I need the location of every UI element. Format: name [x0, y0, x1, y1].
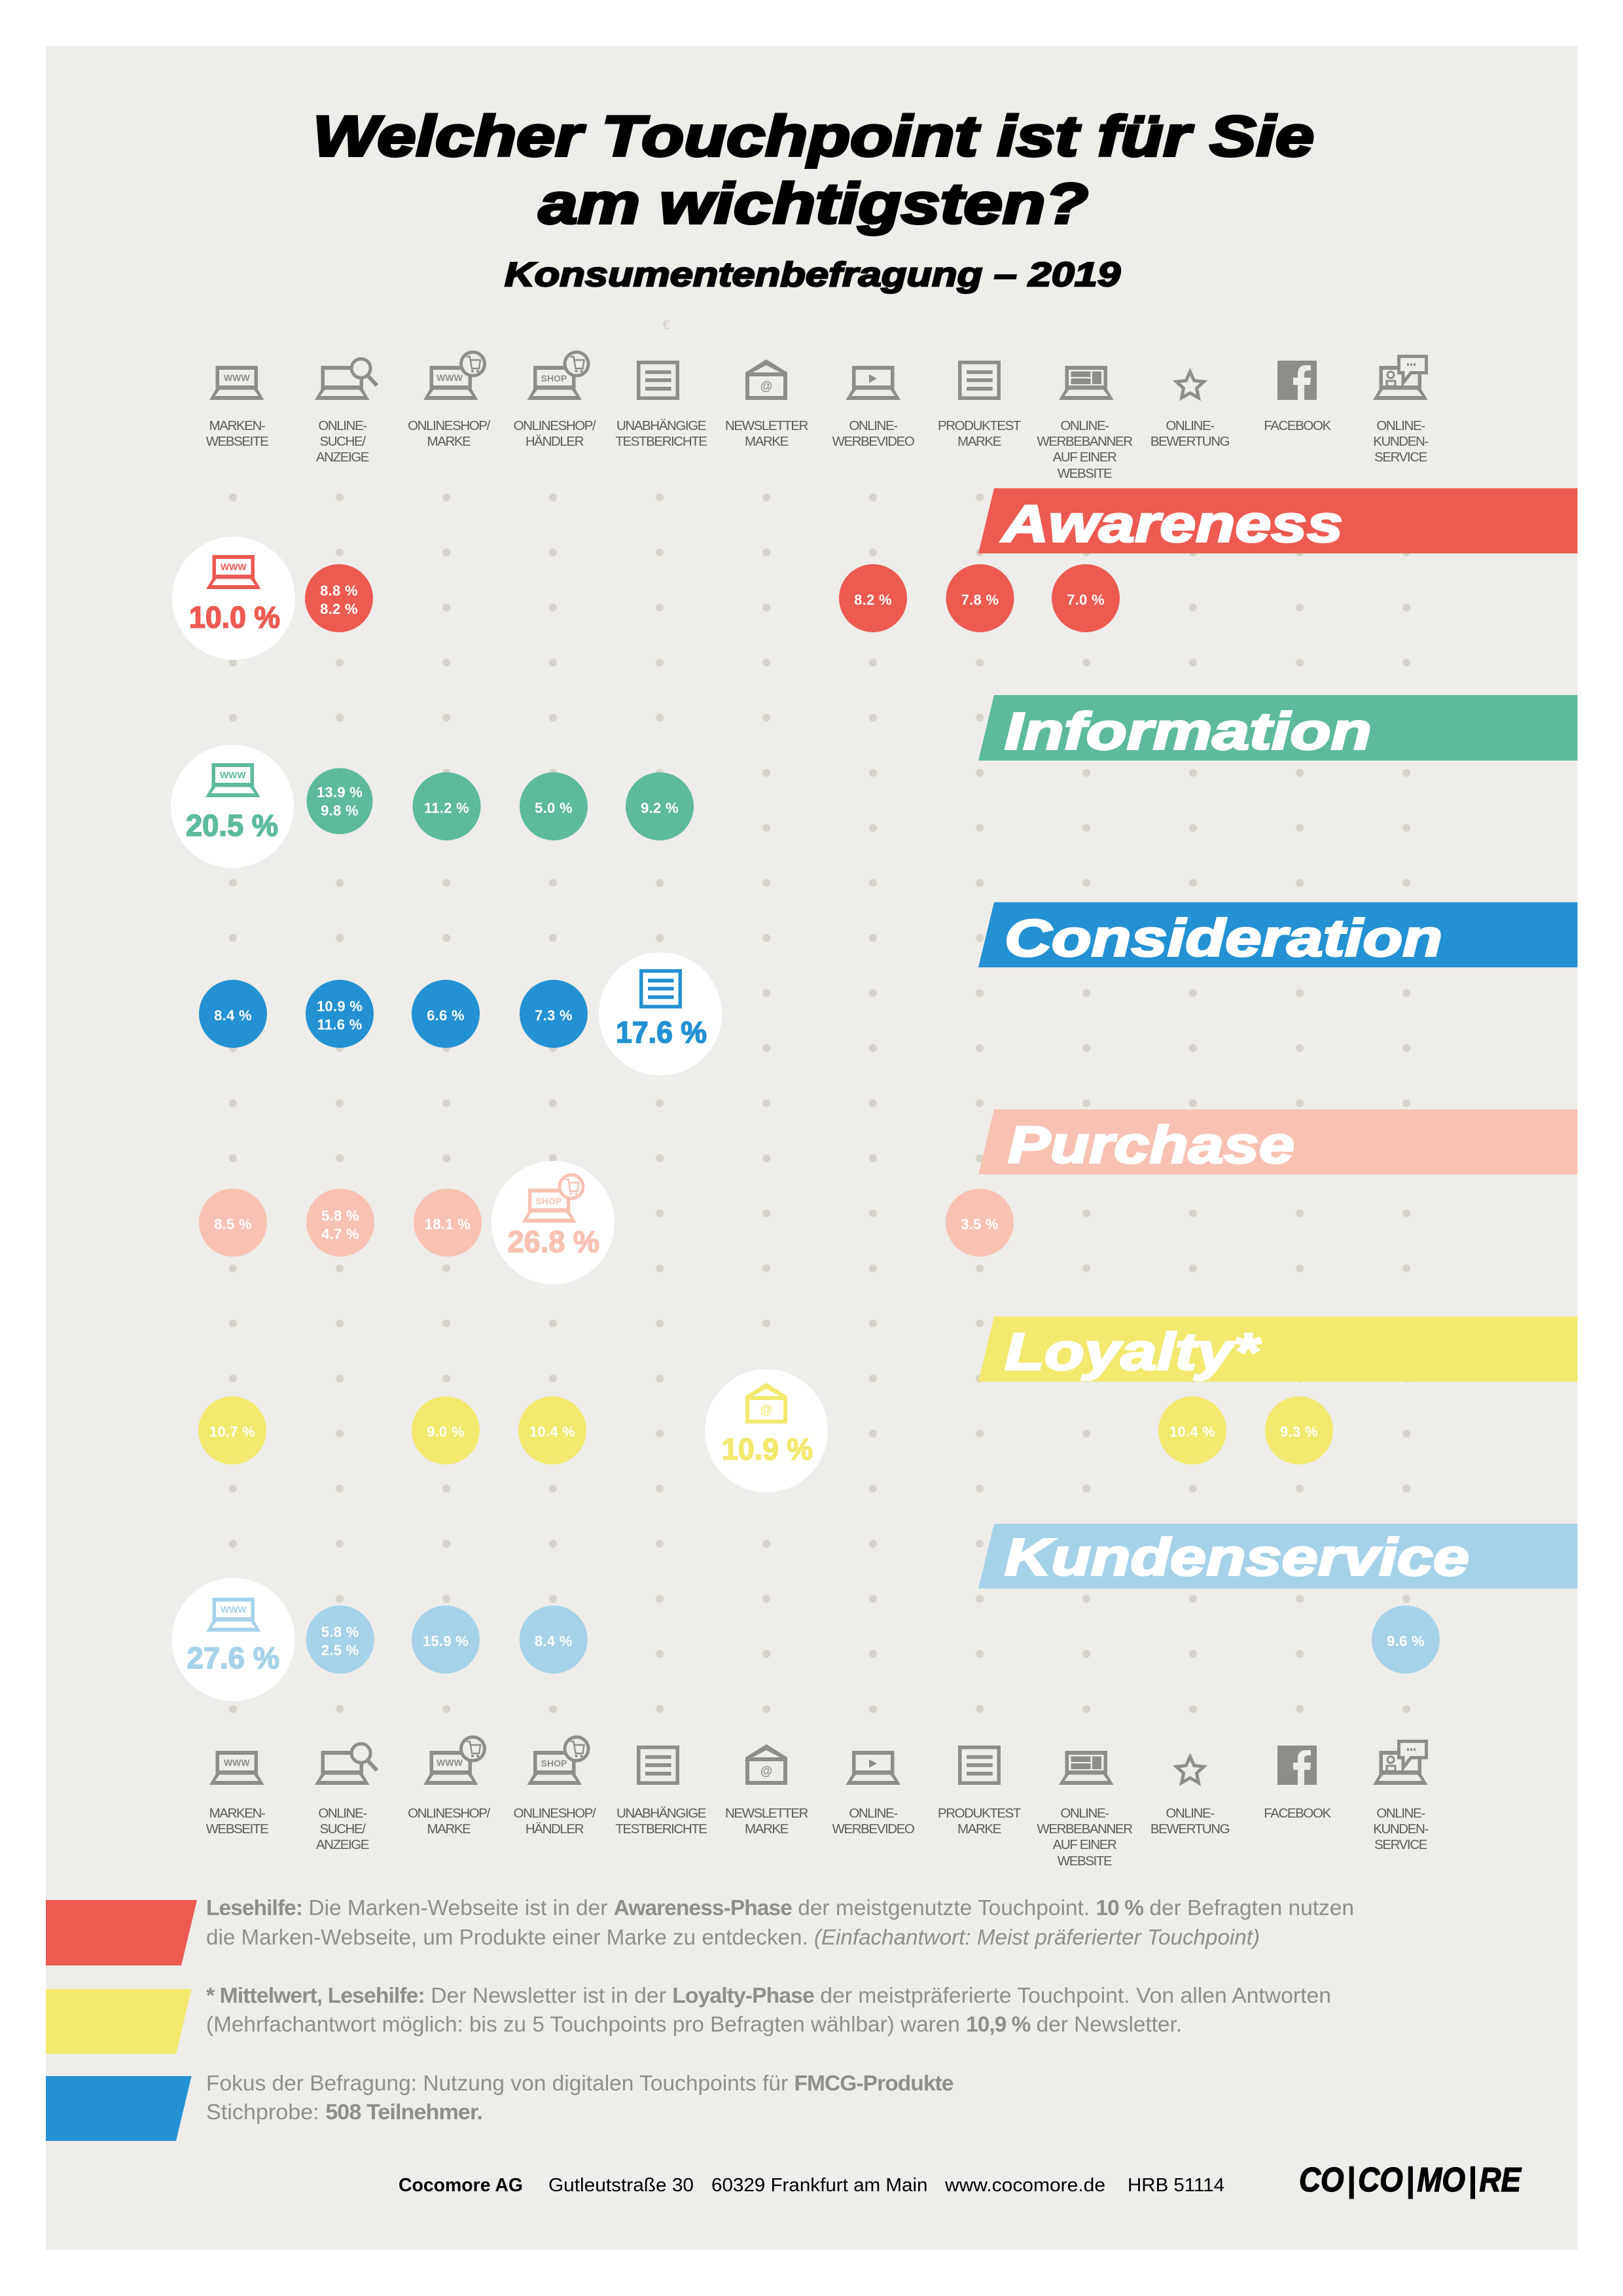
- big circle: newsletter 10.9 %: [705, 1369, 828, 1492]
- label: werbevideo: WERBEVIDEO: [832, 434, 914, 449]
- footer address: 60329 Frankfurt am Main: [711, 2175, 928, 2196]
- big circle: newsletter 10.9 %: 10.9 %: [722, 1432, 813, 1466]
- panel: consideration row: [199, 902, 1577, 1075]
- icon: online-suche: [315, 1744, 377, 1785]
- label: produkttest: MARKE: [957, 434, 1001, 449]
- icon: marken-webseite: WWW: [224, 1757, 250, 1768]
- bubble: marken-webseite: 8.4 %: [214, 1007, 252, 1024]
- label: werbebanner: WEBSITE: [1058, 1854, 1112, 1869]
- label: marken-webseite: WEBSEITE: [206, 434, 268, 449]
- title: Welcher Touchpoint ist für Sie: [313, 105, 1314, 168]
- bubble: onlineshop marke: [412, 772, 480, 840]
- label: onlineshop haendler: HÄNDLER: [526, 1821, 584, 1837]
- bubble: online-suche: [305, 564, 373, 632]
- icon: onlineshop marke: WWW: [437, 1757, 463, 1768]
- label: bewertung: BEWERTUNG: [1150, 434, 1230, 449]
- label: kundenservice: KUNDEN-: [1373, 1821, 1428, 1837]
- swatch: yellow: [46, 1989, 192, 2054]
- label: werbebanner: ONLINE-: [1060, 418, 1109, 433]
- bubble: kundenservice: [1372, 1605, 1440, 1674]
- top touchpoint icons row: [209, 352, 1428, 400]
- big circle: testberichte 17.6 %: 17.6 %: [616, 1015, 707, 1049]
- bubble: onlineshop haendler: 7.3 %: [535, 1007, 573, 1024]
- icon: werbevideo: [846, 1751, 901, 1785]
- bubble: online-suche: [306, 768, 373, 834]
- icon: marken-webseite: [209, 1751, 264, 1785]
- bubble: online-bewertung: [1158, 1397, 1226, 1465]
- label: kundenservice: SERVICE: [1374, 1837, 1427, 1852]
- bubble: online-suche: 5.8 %: [321, 1624, 359, 1640]
- label: facebook: FACEBOOK: [1264, 418, 1332, 433]
- banner: purchase: Purchase: [1008, 1115, 1294, 1174]
- bubble: kundenservice: 9.6 %: [1387, 1633, 1425, 1649]
- label: newsletter: NEWSLETTER: [725, 1806, 808, 1821]
- label: bewertung: BEWERTUNG: [1150, 1821, 1230, 1837]
- icon: newsletter: [745, 1744, 787, 1785]
- footer address: www.cocomore.de: [944, 2175, 1105, 2196]
- footer address: Cocomore AG: [399, 2175, 523, 2196]
- label: online-suche: ONLINE-: [318, 1806, 366, 1821]
- label: produkttest: PRODUKTEST: [938, 418, 1022, 433]
- bubble: onlineshop marke: [412, 1605, 480, 1674]
- bubble: marken-webseite: 10.7 %: [209, 1424, 255, 1440]
- label: facebook: FACEBOOK: [1264, 1806, 1332, 1821]
- big circle: marken-webseite 27.6 %: WWW: [221, 1604, 247, 1615]
- bubble: online-suche: 8.8 %: [320, 583, 358, 599]
- label: online-suche: SUCHE/: [319, 1821, 366, 1837]
- banner: information: [978, 695, 1577, 761]
- label: bewertung: ONLINE-: [1166, 418, 1214, 433]
- bubble: marken-webseite: [198, 1397, 266, 1465]
- bubble: online-suche: 4.7 %: [321, 1226, 359, 1242]
- icon: kundenservice: [1373, 1741, 1428, 1785]
- icon: werbebanner: [1059, 1751, 1114, 1785]
- bubble: online-suche: [306, 1189, 374, 1257]
- label: newsletter: MARKE: [745, 1821, 789, 1837]
- label: onlineshop marke: MARKE: [427, 1821, 471, 1837]
- icon: online-suche: [315, 359, 377, 400]
- icon: newsletter: @: [760, 1765, 772, 1778]
- big circle: marken-webseite 10.0 %: WWW: [221, 562, 247, 572]
- bubble: online-suche: 13.9 %: [317, 784, 363, 800]
- icon: newsletter: @: [760, 380, 772, 393]
- bubble: onlineshop marke: 11.2 %: [424, 800, 469, 816]
- bubble: testberichte: [626, 772, 694, 840]
- icon: kundenservice: [1373, 356, 1428, 400]
- label: produkttest: PRODUKTEST: [938, 1806, 1022, 1821]
- label: testberichte: UNABHÄNGIGE: [616, 1806, 706, 1821]
- legend text: focus and sample: Stichprobe: 508 Teilnehmer.: [206, 2100, 482, 2124]
- label: testberichte: TESTBERICHTE: [615, 434, 707, 449]
- bubble: onlineshop haendler: [520, 1605, 588, 1674]
- label: newsletter: MARKE: [745, 434, 789, 449]
- icon: onlineshop haendler: SHOP: [541, 373, 567, 384]
- panel: awareness row: [172, 488, 1577, 660]
- panel: kundenservice row: [172, 1524, 1577, 1701]
- bubble: online-suche: 8.2 %: [320, 601, 358, 617]
- legend text: loyalty: * Mittelwert, Lesehilfe: Der Newsletter ist in der Loyalty-Phase der meistpräferierte Touchpoint. Von allen Antworten: [206, 1983, 1331, 2007]
- bubble: werbevideo: 8.2 %: [854, 592, 892, 608]
- label: werbebanner: WERBEBANNER: [1037, 434, 1132, 449]
- icon: newsletter: [745, 359, 787, 400]
- label: onlineshop marke: MARKE: [427, 434, 471, 449]
- bubble: onlineshop haendler: 5.0 %: [535, 800, 573, 816]
- bubble: online-suche: 9.8 %: [321, 802, 359, 819]
- bubble: onlineshop marke: [412, 980, 480, 1048]
- bubble: produkttest: [946, 564, 1014, 632]
- label: produkttest: MARKE: [957, 1821, 1001, 1837]
- icon: testberichte: [637, 361, 679, 400]
- bottom touchpoint icons row: [209, 1737, 1428, 1785]
- banner: information: Information: [1005, 702, 1372, 761]
- big circle: onlineshop haendler 26.8 %: 26.8 %: [508, 1225, 599, 1259]
- label: marken-webseite: MARKEN-: [209, 1806, 265, 1821]
- legend text: awareness: [206, 1895, 1354, 1949]
- label: newsletter: NEWSLETTER: [725, 418, 808, 433]
- bubble: onlineshop haendler: [520, 772, 588, 840]
- label: werbevideo: ONLINE-: [849, 418, 897, 433]
- panel: information row: [171, 695, 1577, 868]
- label: testberichte: TESTBERICHTE: [615, 1821, 707, 1837]
- bubble: online-bewertung: 10.4 %: [1169, 1424, 1215, 1440]
- bubble: produkttest: 7.8 %: [961, 592, 999, 608]
- label: onlineshop marke: ONLINESHOP/: [408, 418, 491, 433]
- icon: onlineshop marke: [423, 1737, 484, 1785]
- big circle: newsletter 10.9 %: @: [760, 1403, 772, 1417]
- bottom touchpoint labels: [206, 1806, 1428, 1869]
- bubble: online-suche: 11.6 %: [317, 1016, 363, 1033]
- bubble: werbebanner: [1052, 564, 1120, 632]
- bubble: marken-webseite: [199, 1189, 267, 1257]
- icon: onlineshop haendler: SHOP: [541, 1758, 567, 1768]
- bubble: marken-webseite: [199, 980, 267, 1048]
- bubble: facebook: [1265, 1397, 1333, 1465]
- big circle: marken-webseite 27.6 %: [172, 1578, 295, 1701]
- icon: werbebanner: [1059, 366, 1114, 400]
- small euro mark: €: [662, 318, 670, 332]
- legend text: awareness: die Marken-Webseite, um Produkte einer Marke zu entdecken. (Einfachantwort: Meist präferierter Touchpoint): [206, 1925, 1260, 1949]
- bubble: onlineshop marke: [414, 1189, 482, 1257]
- footer address: [399, 2175, 1224, 2196]
- top touchpoint labels: [206, 418, 1428, 481]
- banner: consideration: [978, 902, 1577, 967]
- bubble: online-suche: [306, 1605, 374, 1674]
- icon: produkttest: [958, 1746, 1001, 1785]
- label: online-suche: SUCHE/: [319, 434, 366, 449]
- label: werbebanner: AUF EINER: [1053, 450, 1116, 465]
- bubble: onlineshop marke: 6.6 %: [427, 1007, 465, 1024]
- legend text: focus and sample: Fokus der Befragung: Nutzung von digitalen Touchpoints für FMCG-Produkte: [206, 2071, 954, 2095]
- banner: loyalty: Loyalty*: [1005, 1322, 1262, 1381]
- bubble: online-suche: 2.5 %: [321, 1642, 359, 1659]
- legend: survey focus: [46, 2071, 954, 2141]
- big circle: marken-webseite 20.5 %: WWW: [220, 770, 246, 780]
- banner: awareness: Awareness: [1001, 495, 1343, 552]
- bubble: onlineshop marke: 18.1 %: [425, 1216, 471, 1232]
- icon: marken-webseite: WWW: [224, 372, 250, 383]
- legend text: loyalty: (Mehrfachantwort möglich: bis zu 5 Touchpoints pro Befragten wählbar) waren 10,9 % der Newsletter.: [206, 2012, 1182, 2036]
- subtitle: Konsumentenbefragung – 2019: [505, 256, 1120, 294]
- icon: marken-webseite: [209, 366, 264, 400]
- logo: cocomore: CO|CO|MO|RE: [1299, 2161, 1522, 2199]
- icon: testberichte: [637, 1746, 679, 1785]
- bubble: online-suche: 10.9 %: [317, 998, 363, 1014]
- icon: produkttest: [958, 361, 1001, 400]
- big circle: onlineshop haendler 26.8 %: [491, 1161, 615, 1284]
- label: kundenservice: ONLINE-: [1376, 1806, 1425, 1821]
- bubble: onlineshop haendler: [520, 980, 588, 1048]
- bubble: onlineshop marke: 9.0 %: [427, 1424, 465, 1440]
- banner: kundenservice: Kundenservice: [1005, 1528, 1469, 1587]
- bubble: online-suche: [306, 980, 374, 1048]
- swatch: blue: [46, 2076, 192, 2141]
- bubble: produkttest: 3.5 %: [961, 1216, 999, 1232]
- legend text: focus and sample: [206, 2071, 954, 2124]
- label: onlineshop marke: ONLINESHOP/: [408, 1806, 491, 1821]
- big circle: marken-webseite 27.6 %: 27.6 %: [187, 1641, 279, 1675]
- label: werbebanner: WERBEBANNER: [1037, 1821, 1132, 1837]
- big circle: marken-webseite 10.0 %: 10.0 %: [189, 600, 280, 634]
- bubble: produkttest: [946, 1189, 1014, 1257]
- label: online-suche: ANZEIGE: [316, 450, 369, 465]
- bubble: onlineshop haendler: 8.4 %: [535, 1633, 573, 1649]
- label: onlineshop haendler: ONLINESHOP/: [514, 418, 596, 433]
- icon: onlineshop haendler: [527, 1737, 588, 1785]
- big circle: onlineshop haendler 26.8 %: SHOP: [536, 1196, 562, 1206]
- label: marken-webseite: WEBSEITE: [206, 1821, 268, 1837]
- label: online-suche: ANZEIGE: [316, 1837, 369, 1852]
- bubble: werbebanner: 7.0 %: [1067, 592, 1105, 608]
- label: kundenservice: SERVICE: [1374, 450, 1427, 465]
- bubble: werbevideo: [839, 564, 907, 632]
- bubble: onlineshop haendler: 10.4 %: [529, 1424, 575, 1440]
- bubble: onlineshop haendler: [518, 1397, 586, 1465]
- label: marken-webseite: MARKEN-: [209, 418, 265, 433]
- footer address: HRB 51114: [1128, 2175, 1224, 2196]
- bubble: testberichte: 9.2 %: [641, 800, 679, 816]
- title: [313, 105, 1314, 236]
- bubble: marken-webseite: 8.5 %: [214, 1216, 252, 1232]
- icon: werbevideo: [846, 366, 901, 400]
- label: werbevideo: ONLINE-: [849, 1806, 897, 1821]
- bubble: online-suche: 5.8 %: [321, 1208, 359, 1224]
- panel: purchase row: [199, 1109, 1577, 1284]
- swatch: red: [46, 1900, 197, 1965]
- label: kundenservice: ONLINE-: [1376, 418, 1425, 433]
- footer address: Gutleutstraße 30: [548, 2175, 694, 2196]
- label: onlineshop haendler: ONLINESHOP/: [514, 1806, 596, 1821]
- bubble: facebook: 9.3 %: [1280, 1424, 1318, 1440]
- banner: consideration: Consideration: [1005, 908, 1442, 967]
- icon: facebook: [1277, 361, 1317, 400]
- label: bewertung: ONLINE-: [1166, 1806, 1214, 1821]
- banner: loyalty: [978, 1317, 1577, 1382]
- big circle: marken-webseite 20.5 %: 20.5 %: [186, 808, 278, 842]
- legend text: awareness: Lesehilfe: Die Marken-Webseite ist in der Awareness-Phase der meistgenutzte Touchpoint. 10 % der Befragten nutzen: [206, 1895, 1354, 1920]
- icon: onlineshop marke: WWW: [437, 372, 463, 383]
- label: werbebanner: AUF EINER: [1053, 1837, 1116, 1852]
- legend: reading aid awareness: [46, 1895, 1354, 1965]
- label: testberichte: UNABHÄNGIGE: [616, 418, 706, 433]
- label: werbebanner: ONLINE-: [1060, 1806, 1109, 1821]
- icon: onlineshop marke: [423, 352, 484, 400]
- label: werbebanner: WEBSITE: [1058, 466, 1112, 481]
- legend: reading aid loyalty: [46, 1983, 1331, 2054]
- big circle: testberichte 17.6 %: [599, 952, 722, 1075]
- bubble: onlineshop marke: [412, 1397, 480, 1465]
- banner: kundenservice: [978, 1524, 1577, 1588]
- legend text: loyalty: [206, 1983, 1331, 2036]
- big circle: marken-webseite 10.0 %: [172, 537, 295, 660]
- bubble: onlineshop marke: 15.9 %: [423, 1633, 469, 1649]
- label: onlineshop haendler: HÄNDLER: [526, 434, 584, 449]
- icon: facebook: [1277, 1746, 1317, 1785]
- banner: awareness: [978, 488, 1577, 554]
- icon: online-bewertung: [1177, 372, 1204, 398]
- icon: online-bewertung: [1177, 1757, 1204, 1783]
- panel: loyalty row: [198, 1317, 1577, 1492]
- label: online-suche: ONLINE-: [318, 418, 366, 433]
- banner: purchase: [978, 1109, 1577, 1174]
- title: am wichtigsten?: [539, 172, 1088, 236]
- label: kundenservice: KUNDEN-: [1373, 434, 1428, 449]
- big circle: marken-webseite 20.5 %: [171, 745, 294, 868]
- icon: onlineshop haendler: [527, 352, 588, 400]
- label: werbevideo: WERBEVIDEO: [832, 1821, 914, 1837]
